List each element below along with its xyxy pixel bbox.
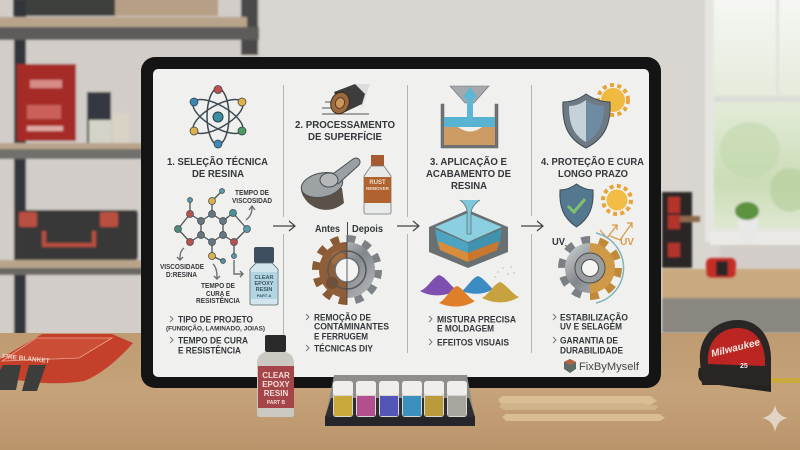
- molecule labels: CURA E: [206, 291, 230, 298]
- column dividers: [284, 85, 532, 355]
- molecule labels: TEMPO DE: [235, 190, 269, 197]
- bullet list: step 2: TÉCNICAS DIY: [314, 344, 374, 354]
- logo: FixByMyself: FixByMyself: [579, 361, 640, 373]
- icon: rust remover bottle: REMOVER: [366, 186, 390, 191]
- arrow: step 3 to 4: [521, 221, 543, 231]
- fire blanket package: FIRE BLANKET: [2, 353, 50, 365]
- label: before and after: [315, 222, 383, 235]
- heading: step 1: [167, 155, 268, 180]
- tape measure: 25: [740, 363, 748, 370]
- bullet list: step 4: DURABILIDADE: [560, 346, 623, 356]
- icon: epoxy resin bottle part A: EPOXY: [255, 281, 274, 287]
- label: before and after: Depois: [352, 224, 383, 235]
- heading: step 4: 4. PROTEÇÃO E CURA: [541, 155, 644, 168]
- icon: gear rusty and clean: [316, 235, 378, 305]
- background: window, counter and plant: [662, 0, 800, 333]
- bottle: epoxy resin part B: [257, 335, 294, 417]
- bullet list: step 3: E MOLDAGEM: [437, 324, 494, 334]
- watermark sparkle: [762, 405, 788, 432]
- arrow: step 2 to 3: [397, 221, 419, 231]
- bottle: epoxy resin part B: PART B: [267, 400, 286, 406]
- heading: step 4: LONGO PRAZO: [558, 168, 628, 180]
- panel 4: protection and curing: [541, 85, 644, 373]
- heading: step 3: 3. APLICAÇÃO E: [430, 155, 507, 168]
- icon: epoxy resin bottle part A: CLEAR: [255, 275, 273, 281]
- bullet list: step 1: TEMPO DE CURA: [178, 336, 248, 346]
- bullet list: step 3: [429, 314, 516, 348]
- icon: abrasive roller: [322, 84, 370, 116]
- bullet list: step 1: E RESISTÊNCIA: [178, 344, 241, 356]
- labels: UV: UV: [620, 237, 634, 248]
- heading: step 2: DE SUPERFÍCIE: [308, 130, 382, 143]
- icon: funnel pouring into mould: [441, 86, 498, 148]
- chart: molecule diagram: [174, 188, 250, 264]
- icon: rust remover bottle: [364, 155, 391, 214]
- pigment vial tray: [325, 375, 475, 426]
- icon: epoxy resin bottle part A: PART A: [257, 293, 271, 298]
- bullet list: step 4: UV E SELAGEM: [560, 322, 622, 332]
- bullet list: step 2: REMOÇÃO DE: [314, 312, 371, 324]
- tablet: [141, 57, 661, 388]
- icon: protected gear: [562, 233, 624, 303]
- molecule labels: [160, 190, 272, 305]
- heading: step 3: RESINA: [451, 180, 487, 192]
- heading: step 1: DE RESINA: [192, 168, 244, 180]
- bullet list: step 4: GARANTIA DE: [560, 336, 618, 346]
- label: before and after: Antes: [315, 224, 340, 235]
- icon: small sun: [603, 186, 631, 214]
- bottle: epoxy resin part B: EPOXY: [262, 380, 290, 389]
- panel 1: resin selection: [160, 86, 278, 356]
- labels: UV: [552, 237, 634, 252]
- icon: rust remover bottle: RUST: [369, 180, 386, 186]
- bullet list: step 1: [166, 314, 265, 356]
- icon: epoxy resin bottle part A: [250, 247, 278, 305]
- heading: step 3: [426, 155, 511, 192]
- bullet list: step 2: [306, 312, 389, 354]
- labels: UV: UV: [552, 237, 565, 248]
- molecule labels: RESISTÊNCIA: [196, 296, 240, 305]
- bullet list: step 1: (FUNDIÇÃO, LAMINADO, JOIAS): [166, 324, 265, 332]
- bullet list: step 1: TIPO DE PROJETO: [178, 314, 253, 326]
- heading: step 2: [295, 119, 395, 143]
- bullet list: step 4: ESTABILIZAÇÃO: [560, 312, 628, 324]
- icon: UV arrows: [600, 223, 632, 240]
- bullet list: step 2: E FERRUGEM: [314, 332, 368, 342]
- heading: step 4: [541, 155, 644, 180]
- heading: step 3: ACABAMENTO DE: [426, 168, 511, 180]
- icon: sun behind shield: [598, 85, 628, 115]
- screen panel: [153, 69, 649, 377]
- bullet list: step 3: MISTURA PRECISA: [437, 314, 516, 326]
- heading: step 2: 2. PROCESSAMENTO: [295, 119, 395, 131]
- panel 2: surface processing: [295, 84, 395, 354]
- desk surface: [0, 333, 800, 450]
- bullet list: step 3: EFEITOS VISUAIS: [437, 338, 509, 348]
- arrow: step 1 to 2: [273, 221, 295, 231]
- icon: shield with check: [560, 184, 593, 227]
- icon: pigment powder piles: [420, 266, 519, 307]
- icon: atom: [188, 86, 248, 148]
- heading: step 1: 1. SELEÇÃO TÉCNICA: [167, 155, 268, 168]
- wooden mixing sticks: [498, 396, 665, 421]
- molecule labels: D:RESINA: [166, 272, 197, 279]
- tape measure: [698, 320, 800, 392]
- icon: epoxy resin bottle part A: RESIN: [256, 287, 272, 293]
- bullet list: step 2: CONTAMINANTES: [314, 322, 389, 332]
- panel 3: resin application: [420, 86, 519, 348]
- icon: wire brush: [299, 158, 360, 210]
- molecule labels: TEMPO DE: [201, 283, 235, 290]
- molecule labels: VISCOSIDAD: [232, 198, 272, 205]
- fire blanket package: [0, 334, 133, 391]
- background: workshop wall and shelves: [0, 0, 800, 340]
- molecule callout arrows: [177, 206, 255, 279]
- molecule labels: VISCOSIDADE: [160, 264, 204, 271]
- icon: large shield: [563, 94, 610, 148]
- bottle: epoxy resin part B: CLEAR: [262, 371, 290, 380]
- bottle: epoxy resin part B: RESIN: [264, 389, 288, 398]
- logo: FixByMyself: [564, 359, 640, 373]
- icon: layered resin mould: [429, 200, 508, 268]
- bullet list: step 4: [553, 312, 628, 356]
- tape measure: Milwaukee: [710, 337, 762, 360]
